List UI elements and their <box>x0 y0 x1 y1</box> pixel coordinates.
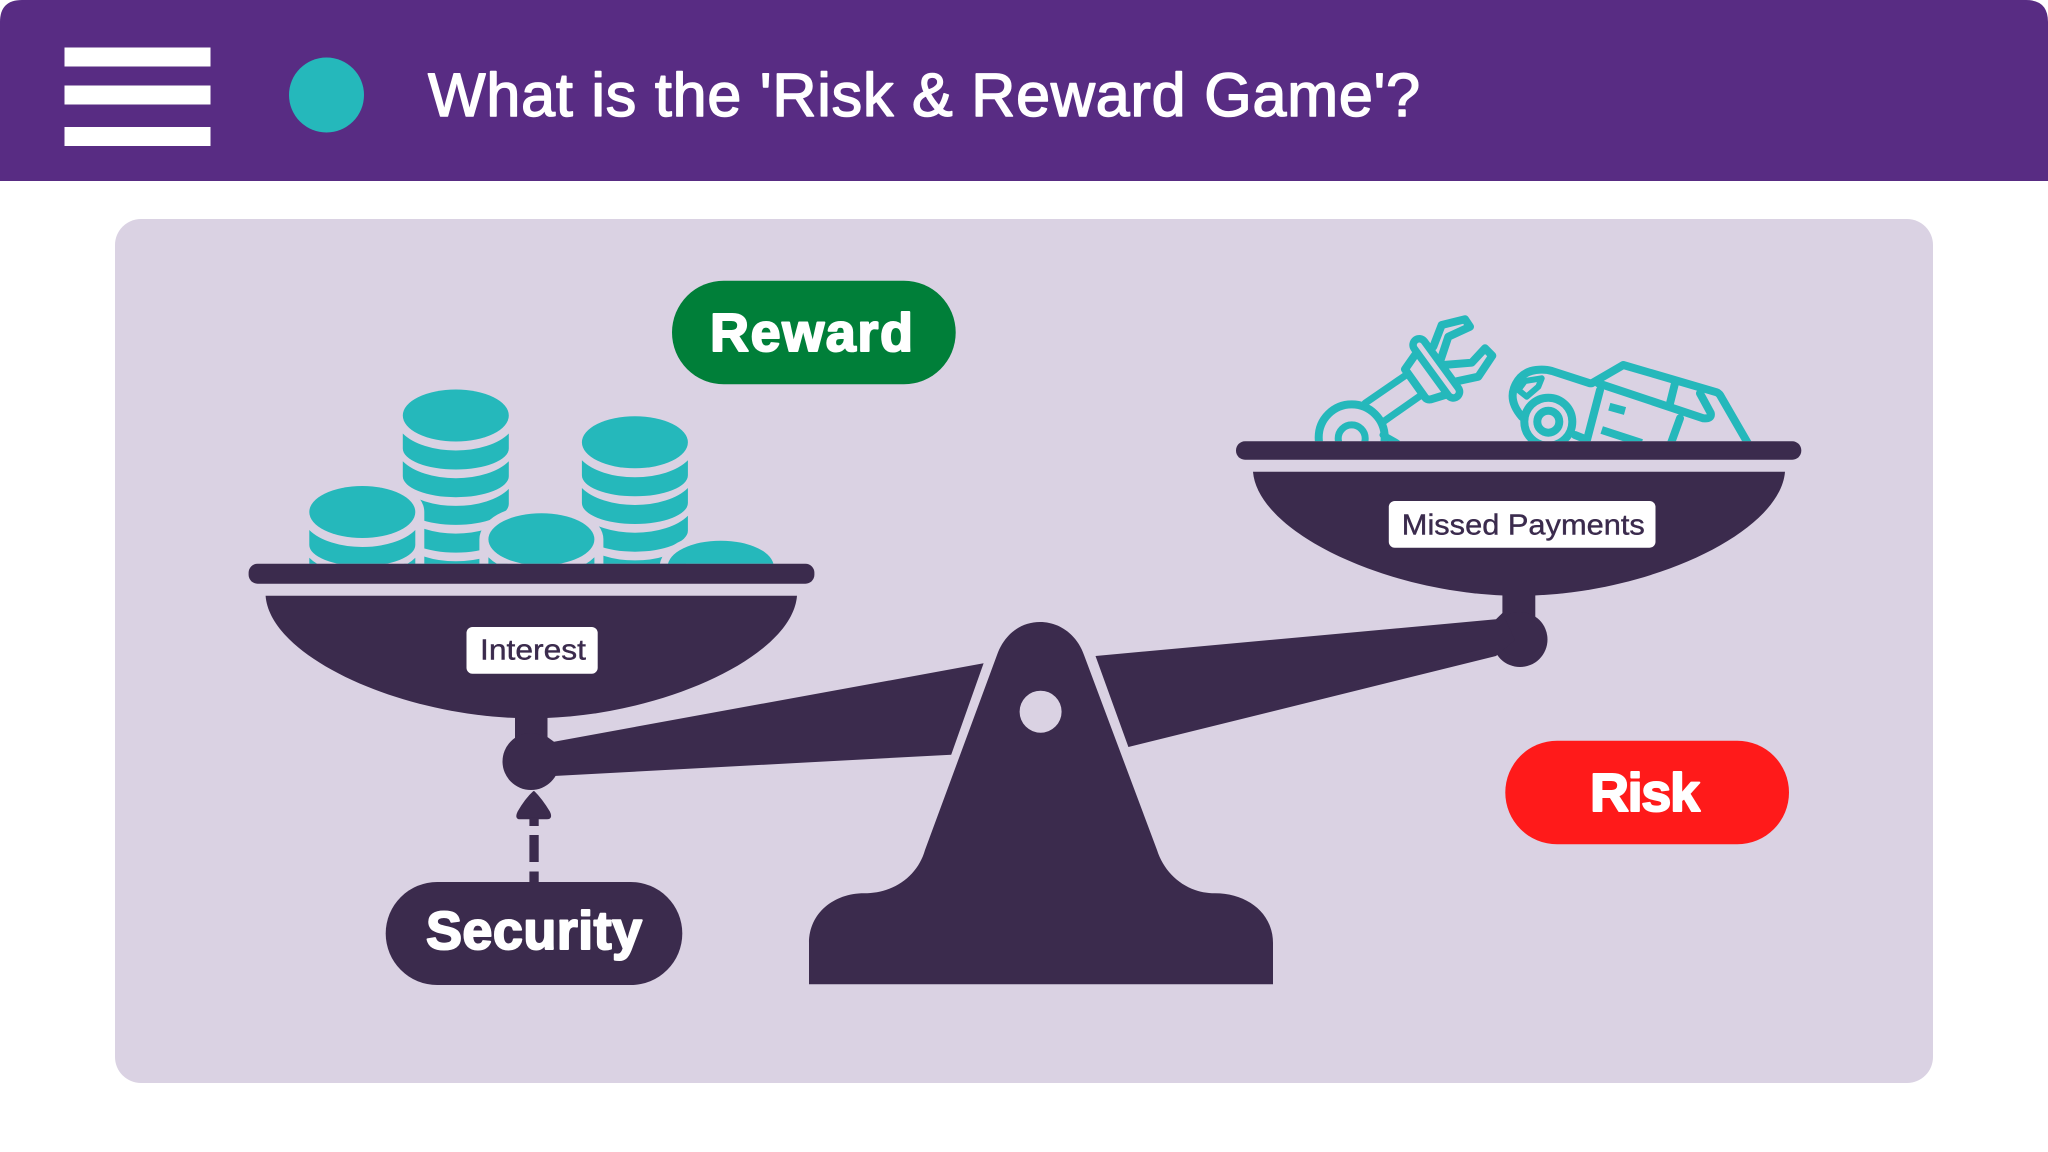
header bar <box>0 0 2048 181</box>
arrow: security up to pivot <box>517 792 550 884</box>
reward pill <box>672 281 956 384</box>
icon: teal circle <box>289 58 364 132</box>
icon: wrench <box>1314 315 1496 442</box>
scale: left stem and pivot <box>502 715 560 790</box>
risk pill: Risk <box>1590 763 1701 823</box>
scale: left bowl <box>266 596 797 718</box>
scale: fulcrum <box>809 622 1273 984</box>
icon: coin stacks <box>309 390 774 564</box>
icon: crashed car <box>1513 365 1748 446</box>
icon: menu bars <box>64 48 210 146</box>
scale: right tray <box>1236 441 1801 460</box>
panel: scale background <box>115 219 1933 1083</box>
security pill <box>386 882 682 985</box>
label: missed payments <box>1389 501 1656 548</box>
scale: right beam <box>1096 613 1515 747</box>
coin stack: front centre <box>479 510 604 564</box>
coin stack: front right <box>660 540 774 564</box>
scale: right bowl <box>1253 472 1785 596</box>
coin stack: back left <box>403 390 509 580</box>
scale: left beam <box>540 663 984 785</box>
coin stack: back right <box>582 416 688 579</box>
label: missed payments: Missed Payments <box>1402 509 1645 541</box>
scale: left tray <box>249 564 814 584</box>
risk pill <box>1505 741 1789 844</box>
coin stack: front left <box>309 486 424 564</box>
scale: right stem and pivot <box>1492 592 1548 667</box>
label: interest <box>466 627 598 674</box>
title: What is the 'Risk & Reward Game'? <box>428 61 1420 129</box>
label: interest: Interest <box>480 634 586 666</box>
security pill: Security <box>426 901 642 961</box>
reward pill: Reward <box>710 303 913 363</box>
icon: wrench and car <box>1314 315 1752 442</box>
